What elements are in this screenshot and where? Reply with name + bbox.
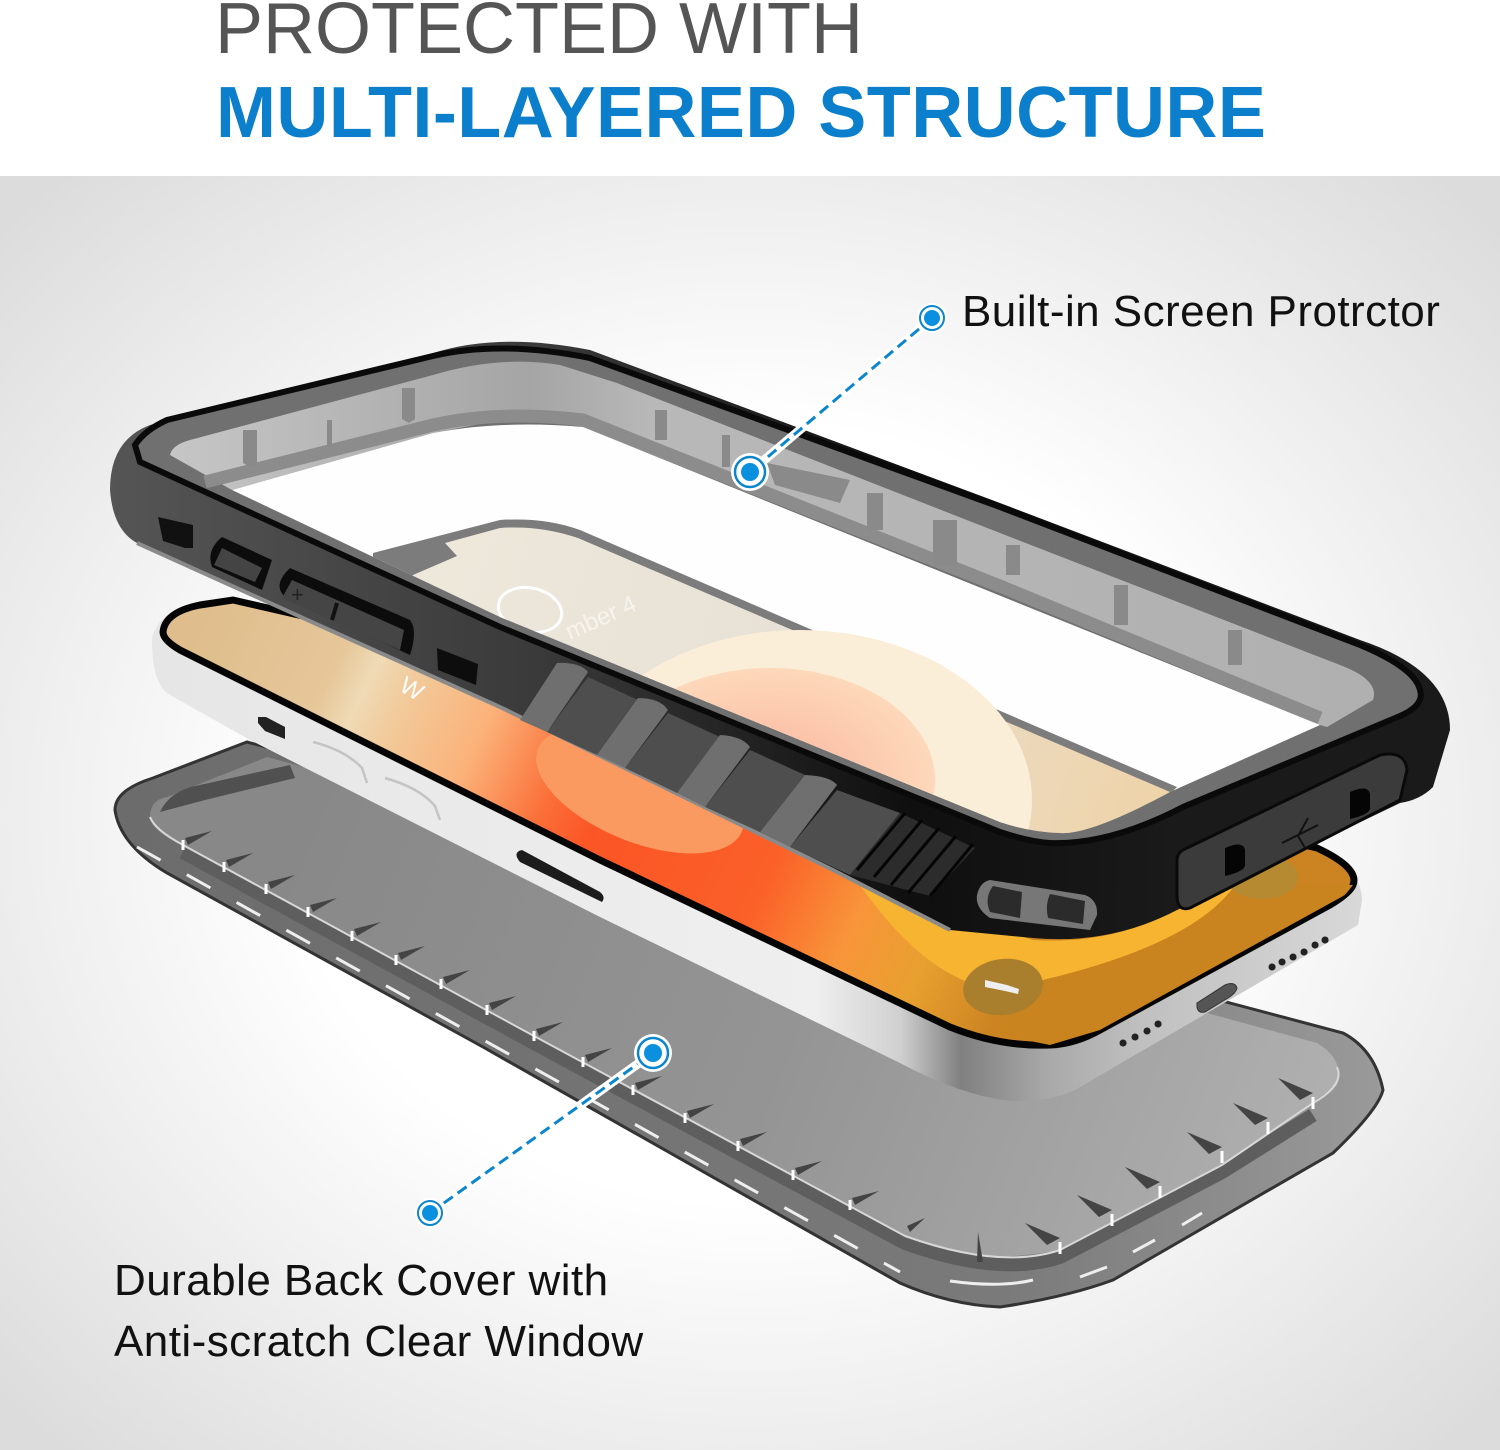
title line 2: MULTI-LAYERED STRUCTURE [216, 73, 1266, 153]
charging port [1197, 984, 1237, 1012]
phone seen through window [373, 520, 1177, 834]
speaker holes [1123, 940, 1325, 1043]
speaker slot [516, 850, 604, 902]
charging port cover [1177, 754, 1407, 909]
phone screen [163, 600, 1354, 1045]
callout line: screen protector [731, 303, 947, 491]
label: back cover: Durable Back Cover with [114, 1256, 609, 1305]
lanyard slot [977, 880, 1097, 930]
lower frame edge highlight [137, 543, 950, 930]
inner translucent strip [170, 362, 1374, 727]
strip tabs [243, 388, 1242, 665]
phone seen through window: mber 4 [561, 590, 641, 645]
cover spikes [185, 831, 1313, 1262]
label: back cover: Anti-scratch Clear Window [114, 1316, 644, 1366]
callout line: back cover [415, 1034, 672, 1228]
phone screen: W [395, 672, 428, 707]
front frame [110, 342, 1450, 970]
usb symbol [1282, 818, 1318, 848]
grey bezel [135, 348, 1421, 843]
back cover [115, 742, 1383, 1307]
mute switch and side buttons [258, 717, 285, 739]
cover window [150, 757, 1339, 1257]
clock ring [496, 586, 564, 634]
phone [152, 600, 1362, 1101]
flashlight button [959, 954, 1047, 1020]
window [232, 425, 1320, 833]
side buttons: + [291, 582, 304, 607]
label: screen protector: Built-in Screen Protrctor [962, 287, 1440, 336]
label: back cover [114, 1256, 644, 1366]
grip ridges [520, 663, 975, 896]
side buttons [158, 517, 478, 685]
